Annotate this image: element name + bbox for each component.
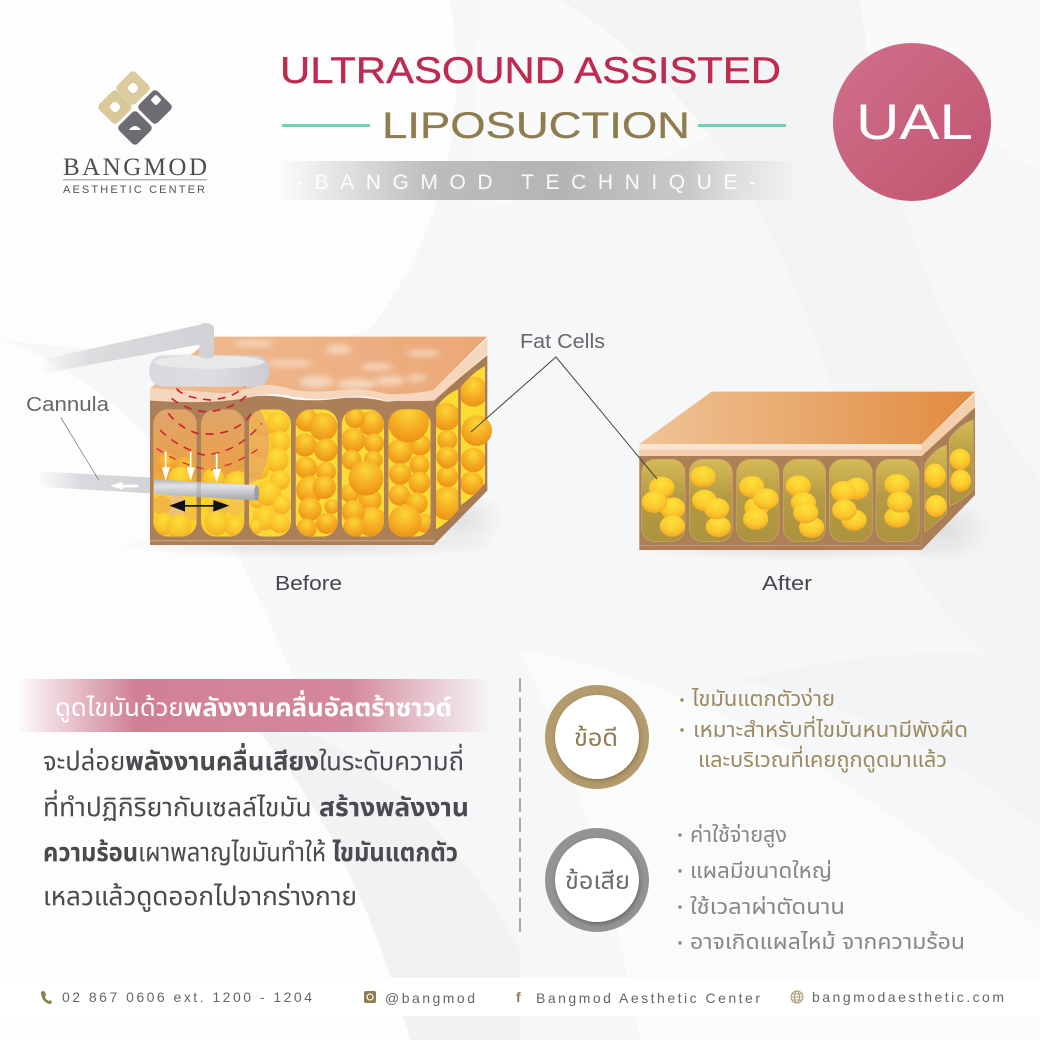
cell wall over cannula xyxy=(197,482,201,497)
list: cons: แผลมีขนาดใหญ่ xyxy=(690,859,832,883)
fat cell balls xyxy=(642,449,971,538)
list: cons: ใช้เวลาผ่าตัดนาน xyxy=(690,895,845,919)
right tissue face xyxy=(434,355,487,545)
contact: phone: 02 867 0606 ext. 1200 - 1204 xyxy=(62,989,312,1005)
skin layer xyxy=(150,338,487,402)
fat cells column 2 xyxy=(201,409,244,536)
title: Liposuction with rules xyxy=(282,105,786,146)
fat cells column 3 pale xyxy=(249,410,291,536)
badge: cons: ข้อเสีย xyxy=(565,868,630,895)
description paragraph xyxy=(43,743,469,912)
device head xyxy=(149,353,269,387)
white suction arrows xyxy=(162,452,221,482)
heading band: suction with ultrasound energy xyxy=(17,679,492,732)
list: pros: ไขมันแตกตัวง่าย xyxy=(691,687,835,711)
skin top surface xyxy=(150,337,487,399)
list: cons xyxy=(678,823,965,954)
list: cons: อาจเกิดแผลไหม้ จากความร้อน xyxy=(690,930,965,954)
front tissue face xyxy=(150,396,434,545)
fat cells column 1 xyxy=(152,409,199,539)
footer contact bar xyxy=(0,978,1040,1016)
badge: UAL xyxy=(833,43,991,201)
label: Cannula: Cannula xyxy=(26,394,110,416)
subtitle band: Bangmod Technique: -BANGMOD TECHNIQUE- xyxy=(296,171,756,194)
logo wordmark: BANGMOD xyxy=(63,154,207,181)
icon: globe xyxy=(791,991,803,1003)
description paragraph: ที่ทำปฏิกิริยากับเซลล์ไขมัน สร้างพลังงาน xyxy=(43,789,469,822)
bulging fat cell xyxy=(461,415,492,446)
illustration: before xyxy=(37,323,510,558)
label: After: After xyxy=(762,573,812,595)
logo tagline: AESTHETIC CENTER xyxy=(63,184,205,196)
badge: cons xyxy=(545,828,649,932)
list: pros: และบริเวณที่เคยถูกดูดมาแล้ว xyxy=(698,745,947,773)
list: pros xyxy=(680,687,968,773)
device arm xyxy=(40,323,214,373)
title: Ultrasound Assisted: ULTRASOUND ASSISTED xyxy=(280,50,781,91)
icon: phone xyxy=(41,991,52,1004)
badge: UAL: UAL xyxy=(856,94,973,150)
logo: Bangmod Aesthetic Center xyxy=(63,70,207,196)
contact: website: bangmodaesthetic.com xyxy=(812,989,1004,1005)
icon: instagram xyxy=(364,991,376,1003)
contact: facebook: Bangmod Aesthetic Center xyxy=(536,990,760,1006)
top skin surface xyxy=(639,392,975,444)
label: Before: Before xyxy=(275,573,342,595)
black movement arrow xyxy=(169,500,229,512)
description paragraph: จะปล่อยพลังงานคลื่นเสียงในระดับความถี่ xyxy=(43,743,464,776)
cannula xyxy=(37,471,259,501)
list: pros: เหมาะสำหรับที่ไขมันหนามีพังผืด xyxy=(693,715,968,742)
icon: facebook: f xyxy=(516,989,521,1005)
description paragraph: ความร้อนเผาพลาญไขมันทำให้ ไขมันแตกตัว xyxy=(43,837,458,867)
ultrasound heat waves xyxy=(157,386,263,470)
fat cells column 4 xyxy=(293,408,339,538)
badge: pros xyxy=(545,685,649,789)
fat cells column 5 xyxy=(341,408,387,538)
leader line: cannula xyxy=(61,417,99,480)
heading band: suction with ultrasound energy: ดูดไขมันด้วยพลังงานคลื่นอัลตร้าซาวด์ xyxy=(55,690,452,723)
illustration: after xyxy=(630,392,991,564)
subtitle band: Bangmod Technique xyxy=(276,161,792,200)
empty cells xyxy=(642,420,973,542)
contact: instagram: @bangmod xyxy=(385,990,475,1006)
leader lines: fat cells xyxy=(471,357,657,479)
right tissue xyxy=(922,407,975,550)
front tissue xyxy=(639,456,922,550)
fat cells side column 2 xyxy=(460,366,485,506)
description paragraph: เหลวแล้วดูดออกไปจากร่างกาย xyxy=(43,881,357,912)
list: cons: ค่าใช้จ่ายสูง xyxy=(690,823,787,848)
fat cells side column 1 xyxy=(436,390,458,530)
skin band xyxy=(639,393,975,456)
icon: logo diamonds xyxy=(97,70,173,146)
label: Fat Cells: Fat Cells xyxy=(520,331,605,353)
fat cells column 6 xyxy=(388,409,431,537)
title: Liposuction with rules: LIPOSUCTION xyxy=(382,105,690,146)
badge: pros: ข้อดี xyxy=(574,725,618,752)
